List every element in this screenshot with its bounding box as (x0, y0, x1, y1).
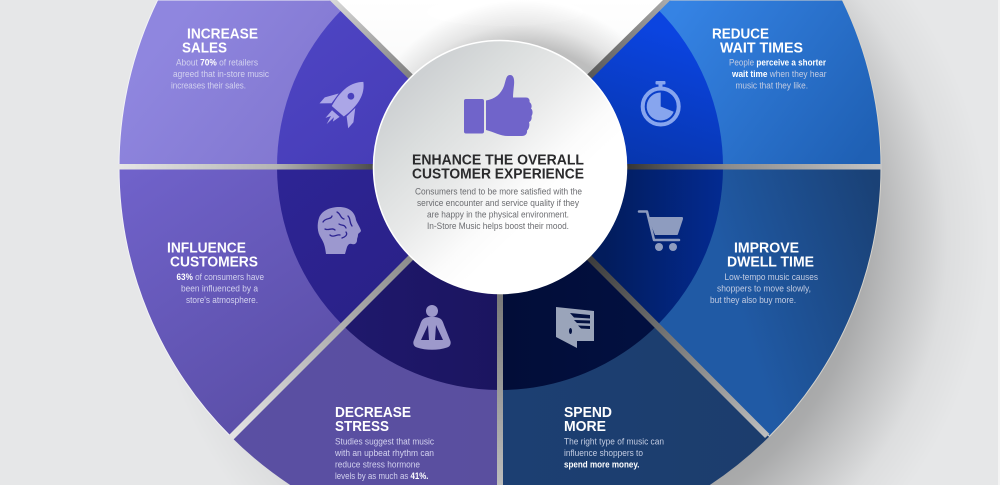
heading: decrease stress (335, 405, 411, 435)
text: increase sales body: About 70% of retailers (176, 58, 259, 68)
heading: improve dwell time (727, 240, 814, 270)
text: improve dwell time body: shoppers to move slowly, (717, 284, 811, 294)
heading: increase sales (182, 26, 258, 56)
text: improve dwell time body: but they also buy more. (710, 295, 796, 305)
panel: spend more (500, 167, 769, 485)
text: decrease stress body: with an upbeat rhythm can (334, 448, 434, 458)
text: center body: In-Store Music helps boost their mood. (427, 221, 569, 231)
text: reduce wait times body (729, 58, 827, 90)
panel: influence customers (119, 167, 500, 436)
text: decrease stress body: reduce stress hormone (335, 460, 420, 470)
panel: increase sales (119, 0, 500, 167)
heading: enhance the overall customer experience (412, 152, 584, 182)
panel: reduce wait times (500, 0, 881, 167)
icon: thumbs up (464, 75, 533, 136)
icon: wallet (556, 307, 594, 348)
icon: rocket (312, 69, 378, 137)
text: reduce wait times body: music that they like. (736, 80, 808, 90)
icon: brain head (318, 207, 361, 254)
heading: influence customers: INFLUENCE (167, 240, 246, 256)
panel: improve dwell time (500, 167, 881, 436)
text: center body: service encounter and service quality if they (417, 198, 580, 208)
white top wedge (333, 0, 667, 167)
heading: enhance the overall customer experience: CUSTOMER EXPERIENCE (412, 166, 584, 182)
panel: decrease stress (231, 167, 500, 485)
text: influence customers body (176, 272, 264, 305)
heading: reduce wait times: REDUCE (712, 26, 769, 42)
text: center body: are happy in the physical environment. (427, 210, 569, 220)
text: influence customers body: been influenced by a (181, 284, 258, 294)
heading: decrease stress: DECREASE (335, 405, 411, 421)
icon: meditating person (413, 305, 451, 350)
text: center body: Consumers tend to be more satisfied with the (415, 186, 582, 196)
heading: influence customers (167, 240, 258, 270)
heading: decrease stress: STRESS (335, 419, 389, 435)
heading: improve dwell time: IMPROVE (734, 240, 799, 256)
right edge strip (998, 0, 1000, 485)
text: spend more body: influence shoppers to (564, 448, 643, 458)
heading: spend more (564, 405, 612, 435)
text: spend more body (564, 436, 664, 470)
heading: reduce wait times (712, 26, 803, 56)
heading: reduce wait times: WAIT TIMES (720, 40, 803, 56)
text: improve dwell time body: Low-tempo music causes (724, 272, 819, 282)
text: reduce wait times body: wait time when they hear (731, 69, 827, 79)
heading: increase sales: SALES (182, 40, 227, 56)
heading: spend more: SPEND (564, 405, 612, 421)
spokes (118, 0, 882, 485)
heading: spend more: MORE (564, 419, 606, 435)
text: spend more body: spend more money. (564, 460, 640, 470)
text: increase sales body: increases their sales. (171, 80, 246, 90)
text: increase sales body: agreed that in-store music (173, 69, 270, 79)
text: center body (415, 186, 582, 231)
heading: enhance the overall customer experience: ENHANCE THE OVERALL (412, 152, 584, 168)
text: decrease stress body: Studies suggest that music (335, 436, 435, 446)
center circle (374, 40, 626, 294)
heading: increase sales: INCREASE (187, 26, 258, 42)
icon: stopwatch (643, 81, 679, 124)
text: decrease stress body: levels by as much as 41%. (335, 471, 428, 481)
text: decrease stress body (334, 436, 435, 481)
heading: improve dwell time: DWELL TIME (727, 254, 814, 270)
icon: shopping cart (639, 212, 683, 251)
text: influence customers body: store's atmosphere. (186, 295, 258, 305)
text: reduce wait times body: People perceive a shorter (729, 58, 827, 68)
text: increase sales body (171, 58, 270, 90)
text: improve dwell time body (710, 272, 819, 305)
text: influence customers body: 63% of consumers have (176, 272, 264, 282)
text: spend more body: The right type of music can (564, 436, 664, 446)
heading: influence customers: CUSTOMERS (170, 254, 258, 270)
